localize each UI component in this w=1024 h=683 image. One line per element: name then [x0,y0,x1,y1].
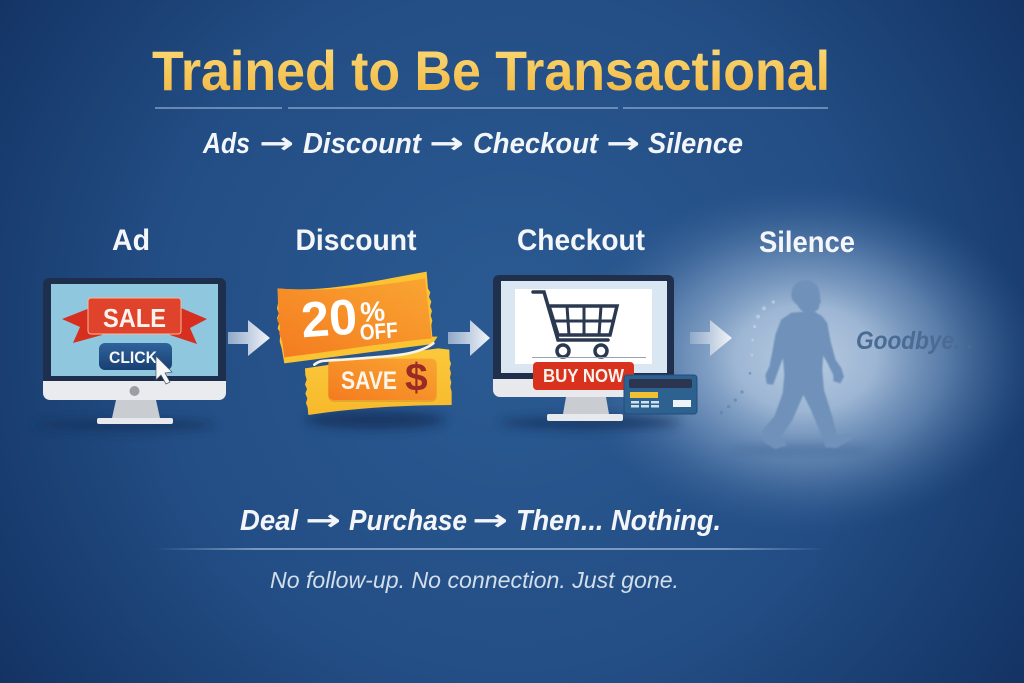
icon: fading walking person [720,281,875,455]
label: Checkout: Checkout [517,224,645,257]
subtitle flow: → [429,126,464,160]
arrow 2 [448,320,490,356]
buy now button [533,362,634,390]
subtitle flow: Discount [303,128,422,160]
closing flow line [240,503,721,537]
top coupon: OFF [359,317,399,345]
bottom divider [155,548,825,550]
top coupon: 20 [299,289,359,348]
label: Discount: Discount [296,224,417,257]
click button: CLICK [109,348,158,367]
subtitle flow: Checkout [473,128,599,160]
subtitle flow: Ads [202,128,250,160]
bottom coupon: $ [405,356,428,400]
closing flow line: → [305,503,341,537]
label: Silence: Silence [759,226,855,259]
goodbye text: Goodbye... [856,327,973,355]
top coupon: % [359,295,386,328]
icon: checkout monitor [493,275,697,429]
closing flow line: Deal [240,505,299,537]
string [314,343,433,365]
subtitle flow [202,126,743,160]
label: Ad: Ad [112,224,150,257]
sale ribbon [62,298,207,344]
closing flow line: Then... Nothing. [516,505,721,537]
title divider [155,107,828,109]
top coupon [277,272,438,363]
subtitle flow: → [606,126,640,160]
shopping cart [533,292,617,357]
credit card [624,375,697,414]
icon: discount coupons [277,272,452,429]
subtitle flow: → [259,126,294,160]
bottom coupon [305,348,452,415]
closing flow line: → [472,503,508,537]
arrow 3 [690,320,732,356]
bottom coupon: SAVE [341,368,397,395]
title: Trained to Be Transactional [152,39,830,102]
sale ribbon: SALE [103,303,166,333]
arrow 1 [228,320,270,356]
cursor [156,356,172,384]
click button [99,343,172,370]
buy now button: BUY NOW [543,366,624,386]
icon: ad monitor [35,278,226,431]
closing tagline: No follow-up. No connection. Just gone. [270,567,679,593]
closing flow line: Purchase [349,505,467,537]
subtitle flow: Silence [648,128,743,160]
